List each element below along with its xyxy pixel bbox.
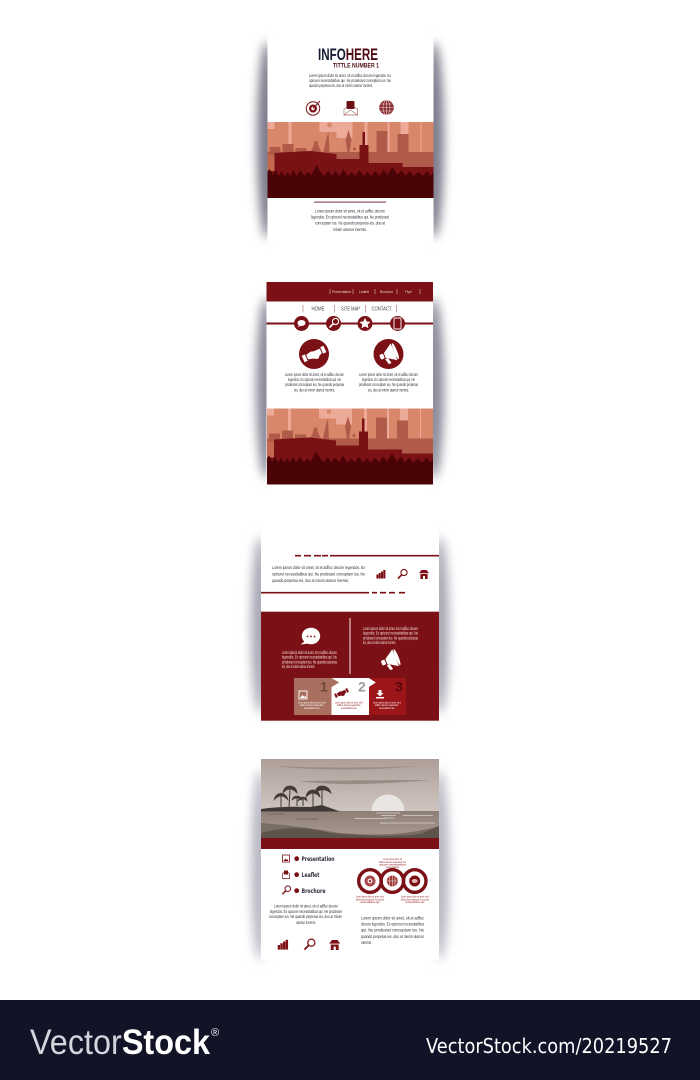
header bar: Brochure xyxy=(380,290,393,294)
ring diagram: necessitatibus qui. xyxy=(405,900,425,904)
island xyxy=(261,805,340,812)
ring diagram: Lorem ipsum dolor sit xyxy=(383,857,402,861)
left text: eis, duo at minim utamur inermis. xyxy=(294,388,335,394)
left text xyxy=(285,372,344,394)
page 1 shadow xyxy=(257,42,444,238)
beach illustration xyxy=(261,759,439,838)
icon timeline xyxy=(266,316,433,331)
header bar: Presentation xyxy=(332,290,351,294)
icon: search xyxy=(398,569,407,578)
page 3 shadow xyxy=(251,537,449,713)
icon: megaphone xyxy=(374,339,404,369)
title: INFOHERE xyxy=(318,46,378,64)
header bar xyxy=(266,282,433,302)
right text: legendos. Ex opicurei necessitatibus qui. Ne xyxy=(363,631,418,636)
intro text xyxy=(309,73,391,89)
left text: conceptam ius. Ne quando perpetua eis, duo at minim xyxy=(269,914,342,920)
divider xyxy=(349,618,351,674)
step 1: 1 xyxy=(320,678,328,694)
panel: page 1 xyxy=(268,34,434,245)
step 1: Lorem ipsum dolor sit amet, sit et xyxy=(298,700,326,704)
step 1: necessitatibus qui. xyxy=(304,706,320,710)
legend list: Brochure xyxy=(302,888,326,895)
subtitle: TITTLE NUMBER 1 xyxy=(333,62,379,69)
step 1 xyxy=(294,678,339,715)
ring diagram: adfluc decore legendos. Ex xyxy=(379,860,406,864)
step 2: adfluc decore legendos. xyxy=(337,703,361,707)
footer logo: VectorStock xyxy=(30,1023,210,1062)
icon: megaphone xyxy=(378,648,402,672)
right text: prodesset conceptam ius. Ne quando perpetua xyxy=(363,635,418,640)
panel: page 3 xyxy=(261,519,439,721)
left text: Lorem ipsum dolor sit amet, sit et adfluc decore xyxy=(285,372,344,378)
intro text: Lorem ipsum dolor sit amet, sit et adfluc decore legendos. Ex xyxy=(309,73,391,79)
ring diagram xyxy=(356,857,429,904)
icon: globe xyxy=(379,100,394,115)
panel: page 2 xyxy=(266,282,433,485)
left text: legendos. Ex opicurei necessitatibus qui. Ne xyxy=(282,655,337,660)
left text: prodesset conceptam ius. Ne quando perpetua xyxy=(282,659,337,664)
ring diagram: adfluc decore legendos. Ex opicurei xyxy=(356,897,384,901)
palm trees xyxy=(274,786,331,807)
right text: legendos. Ex opicurei necessitatibus qui. Ne xyxy=(362,377,415,383)
legend list: Presentation xyxy=(302,856,334,863)
navigation: SITE MAP xyxy=(341,306,361,312)
panel: page 4 xyxy=(261,759,439,960)
step 2: necessitatibus qui. xyxy=(341,706,357,710)
closing text: legendos. Ex opicurei necessitatibus qui. Ne prodesset xyxy=(311,214,389,220)
sun xyxy=(372,794,404,811)
icon: target xyxy=(306,101,320,115)
closing text: Lorem ipsum dolor sit amet, sit et adfluc decore xyxy=(315,208,385,214)
icon: bar chart xyxy=(278,940,288,950)
footer bar xyxy=(0,1000,700,1080)
step 3 xyxy=(369,678,406,715)
top text: opicurei necessitatibus qui. Ne prodesset conceptam ius. Ne xyxy=(272,572,365,578)
red band xyxy=(261,838,439,849)
left text: legendos. Ex opicurei necessitatibus qui. Ne prodesset xyxy=(270,909,342,915)
icon: envelope xyxy=(344,101,358,115)
page 2 shadow xyxy=(256,298,444,478)
red panel xyxy=(261,612,439,721)
icon: handshake xyxy=(299,339,329,369)
left text: Lorem ipsum dolor sit amet, sit et adfluc decore xyxy=(274,904,338,910)
footer id: VectorStock.com/20219527 xyxy=(426,1034,672,1058)
right text: Lorem ipsum dolor sit amet, sit et adfluc decore xyxy=(359,372,418,378)
step 3: necessitatibus qui. xyxy=(379,706,395,710)
ring diagram: opicurei necessitatibus xyxy=(379,862,407,866)
right text: eis, duo at minim utamur inermis. xyxy=(363,640,396,645)
top text: Lorem ipsum dolor sit amet, sit et adfluc decore legendos. Ex xyxy=(272,565,365,571)
top text xyxy=(272,565,365,584)
closing text: minim utamur inermis. xyxy=(333,227,367,233)
navigation: HOME xyxy=(312,306,325,312)
skyline illustration xyxy=(268,122,434,198)
left text xyxy=(282,650,337,669)
bottom dashed rule xyxy=(261,592,405,594)
right text: quando perpetua eis, duo at minim utamur xyxy=(361,934,424,940)
step 3: 3 xyxy=(395,678,403,694)
right text xyxy=(359,372,418,394)
navigation xyxy=(303,305,396,312)
right text: Lorem ipsum dolor sit amet, sit et adfluc xyxy=(361,916,424,922)
ring diagram: Lorem ipsum dolor sit amet, sit et xyxy=(356,894,384,898)
top text: quando perpetua eis, duo at minim utamur inermis. xyxy=(272,578,349,584)
right text: decore legendos. Ex opicurei necessitatibus xyxy=(361,922,424,928)
right text: qui. Ne prodesset conceptam ius. Ne xyxy=(361,928,424,934)
right text: Lorem ipsum dolor sit amet, sit et adfluc decore xyxy=(363,626,418,631)
top dashed rule xyxy=(295,555,439,557)
left text: legendos. Ex opicurei necessitatibus qui. Ne xyxy=(288,377,341,383)
closing text: conceptam ius. Ne quando perpetua eis, duo at xyxy=(315,220,385,226)
step 2 xyxy=(332,678,376,715)
ring diagram: necessitatibus qui. xyxy=(360,900,380,904)
legend list xyxy=(282,855,334,895)
header bar: Flyer xyxy=(405,290,413,294)
ring diagram: Lorem ipsum dolor sit amet, sit et xyxy=(401,894,429,898)
header bar: Leaflet xyxy=(359,290,369,294)
left text: Lorem ipsum dolor sit amet, sit et adfluc decore xyxy=(282,650,337,655)
closing text xyxy=(311,208,389,233)
step 3: adfluc decore legendos. xyxy=(375,703,399,707)
legend list: Leaflet xyxy=(302,872,320,879)
intro text: quando perpetua eis, duo at minim utamur inermis. xyxy=(309,83,373,89)
step 3: Lorem ipsum dolor sit amet, sit et xyxy=(373,700,401,704)
page 4 shadow xyxy=(251,770,449,960)
intro text: opicurei necessitatibus qui. Ne prodesset conceptam ius. Ne xyxy=(309,78,391,84)
right text: prodesset conceptam ius. Ne quando perpetua xyxy=(359,382,418,388)
left text: eis, duo at minim utamur inermis. xyxy=(282,664,315,669)
icon: house xyxy=(329,940,340,950)
right text xyxy=(361,916,424,946)
step 1: adfluc decore legendos. xyxy=(300,703,324,707)
registered mark: ® xyxy=(211,1027,219,1039)
right text: eis, duo at minim utamur inermis. xyxy=(368,388,409,394)
icon: speech bubble xyxy=(300,628,320,644)
left text: prodesset conceptam ius. Ne quando perpetua xyxy=(285,382,344,388)
divider xyxy=(314,202,386,203)
icon: search xyxy=(304,939,315,950)
icon: house xyxy=(419,570,429,579)
icon: bar chart xyxy=(376,570,385,578)
navigation: CONTACT xyxy=(372,306,392,312)
step 2: Lorem ipsum dolor sit amet, sit et xyxy=(335,700,363,704)
right text xyxy=(363,626,418,645)
skyline illustration xyxy=(267,408,433,484)
left text xyxy=(269,904,342,926)
left text: utamur inermis. xyxy=(296,920,316,926)
right text: inermis. xyxy=(361,940,372,946)
ring diagram: adfluc decore legendos. Ex opicurei xyxy=(401,897,429,901)
ring diagram: necessitatibus xyxy=(386,865,399,869)
step 2: 2 xyxy=(358,678,366,694)
